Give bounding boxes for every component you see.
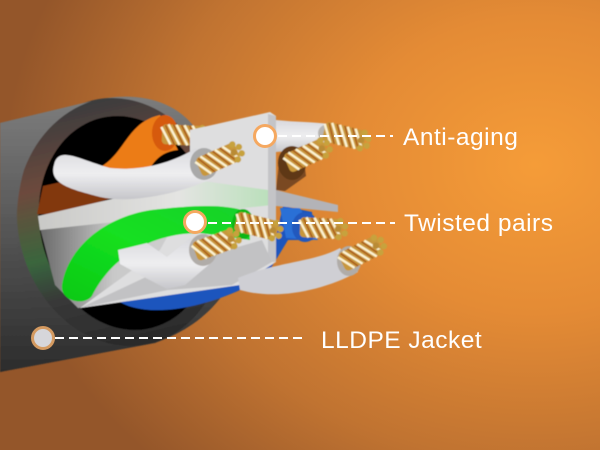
callout: Twisted pairs [184,210,553,237]
callout: Anti-aging [254,124,518,151]
pair: white wire lower left [118,225,244,289]
pair: orange wire [102,115,211,190]
callout: Twisted pairs: Twisted pairs [404,210,553,237]
pair: white wire lower right [238,231,390,294]
pair: grey-white wire upper right [276,120,373,154]
cable jacket [0,77,249,372]
pair: blue wire [118,206,349,310]
pair: white wire upper left [53,138,248,199]
callout: LLDPE Jacket: LLDPE Jacket [321,327,482,354]
callout: LLDPE Jacket [32,327,482,354]
inner filler: grey wires [40,208,250,308]
callout: Anti-aging: Anti-aging [403,124,518,151]
spline separator [38,112,338,308]
pair: green wire [62,206,285,301]
pair: brown wire [276,134,336,191]
inner filler: dark orange [37,180,115,215]
